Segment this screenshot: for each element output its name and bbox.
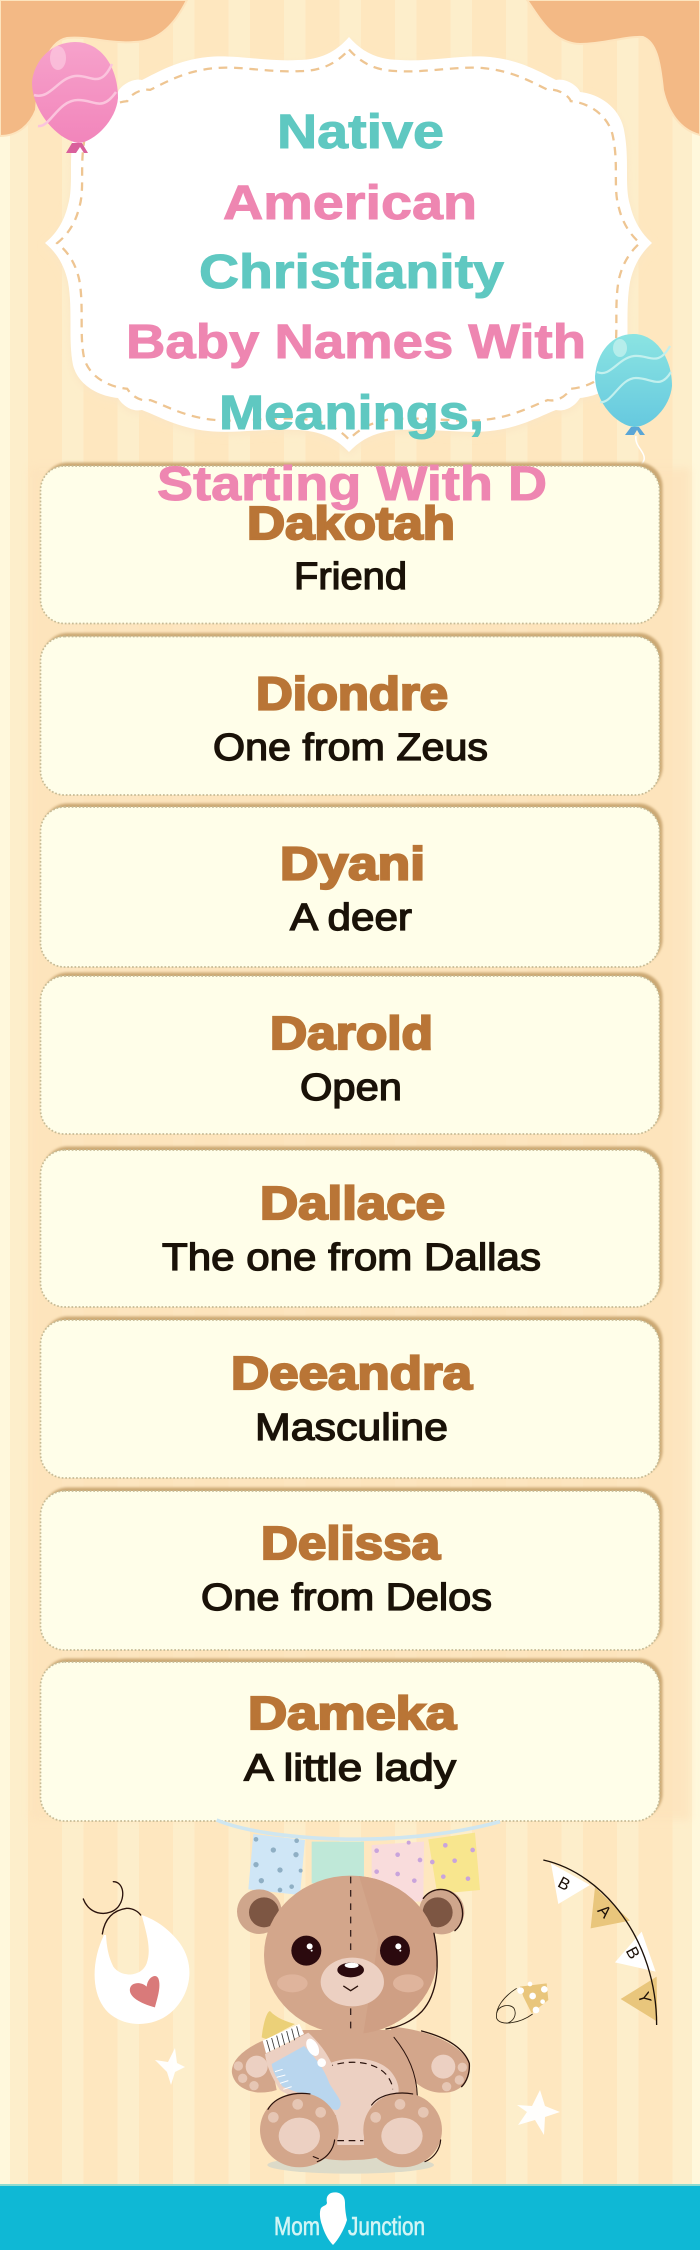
icon: BABY banner: B — [555, 1873, 573, 1895]
balloon: pink — [32, 42, 118, 153]
card 3: Dyani — [40, 804, 662, 967]
card 2: Diondre: Diondre — [256, 668, 448, 720]
icon: BABY banner: Y — [634, 1990, 655, 2006]
card 3: Dyani: A deer — [290, 897, 412, 939]
logo mark — [320, 2192, 347, 2245]
title — [126, 106, 586, 511]
icon: BABY banner: A — [594, 1901, 616, 1922]
top right drape — [527, 0, 700, 135]
footer logo — [274, 2192, 425, 2245]
left arm — [232, 2039, 277, 2093]
footer logo: Mom — [274, 2211, 320, 2241]
card 8: Dameka: Dameka — [248, 1687, 456, 1739]
icon: safety pin — [496, 1982, 548, 2023]
card 8: Dameka — [40, 1658, 662, 1821]
title plaque — [45, 37, 652, 455]
card 7: Delissa — [40, 1488, 662, 1650]
head — [264, 1873, 443, 2034]
title: Meanings, — [219, 387, 484, 440]
bottle — [262, 2011, 345, 2115]
card 4: Darold — [40, 972, 662, 1134]
ground shadow — [267, 2156, 434, 2174]
card 2: Diondre: One from Zeus — [213, 727, 488, 769]
card 2: Diondre — [40, 633, 662, 795]
bunting flags — [217, 1820, 500, 1902]
title: Starting With D — [157, 458, 547, 511]
card 4: Darold: Darold — [270, 1007, 433, 1059]
body — [289, 2030, 417, 2160]
footer bar — [0, 2184, 700, 2250]
icon: teddy bear with bottle — [232, 1873, 469, 2174]
card 6: Deeandra: Deeandra — [231, 1347, 472, 1399]
card 7: Delissa: One from Delos — [201, 1577, 492, 1619]
card 1: Dakotah: Dakotah — [247, 497, 455, 549]
icon: BABY banner — [543, 1860, 657, 2025]
title: Christianity — [199, 246, 504, 299]
card 7: Delissa: Delissa — [261, 1517, 440, 1569]
cheeks — [277, 1974, 424, 1992]
icon: star right — [517, 2090, 560, 2135]
card 5: Dallace: Dallace — [260, 1177, 445, 1229]
card 1: Dakotah — [40, 462, 662, 624]
icon: baby bib — [83, 1882, 189, 2024]
card 4: Darold: Open — [300, 1067, 402, 1109]
card 3: Dyani: Dyani — [280, 838, 425, 890]
muzzle — [321, 1958, 384, 2006]
title: American — [223, 177, 477, 230]
card 6: Deeandra: Masculine — [255, 1407, 448, 1449]
card 6: Deeandra — [40, 1316, 662, 1478]
card 5: Dallace: The one from Dallas — [162, 1237, 541, 1279]
footer logo: Junction — [348, 2211, 425, 2241]
card 1: Dakotah: Friend — [294, 556, 407, 598]
belly patch — [325, 2037, 417, 2145]
eyes — [291, 1936, 410, 1966]
bib heart — [130, 1976, 159, 2007]
title: Native — [277, 106, 444, 159]
title: Baby Names With — [126, 316, 586, 369]
card 5: Dallace — [40, 1146, 662, 1307]
bib ties — [83, 1882, 141, 1934]
ears — [237, 1889, 464, 1934]
card 8: Dameka: A little lady — [244, 1748, 456, 1790]
left foot — [260, 2093, 339, 2167]
icon: star left — [155, 2048, 185, 2085]
nose and mouth — [337, 1963, 364, 1991]
right arm — [390, 2027, 469, 2093]
icon: BABY banner: B — [622, 1944, 644, 1962]
balloon: teal — [595, 334, 672, 476]
top left drape — [0, 0, 187, 136]
right foot — [363, 2093, 442, 2167]
